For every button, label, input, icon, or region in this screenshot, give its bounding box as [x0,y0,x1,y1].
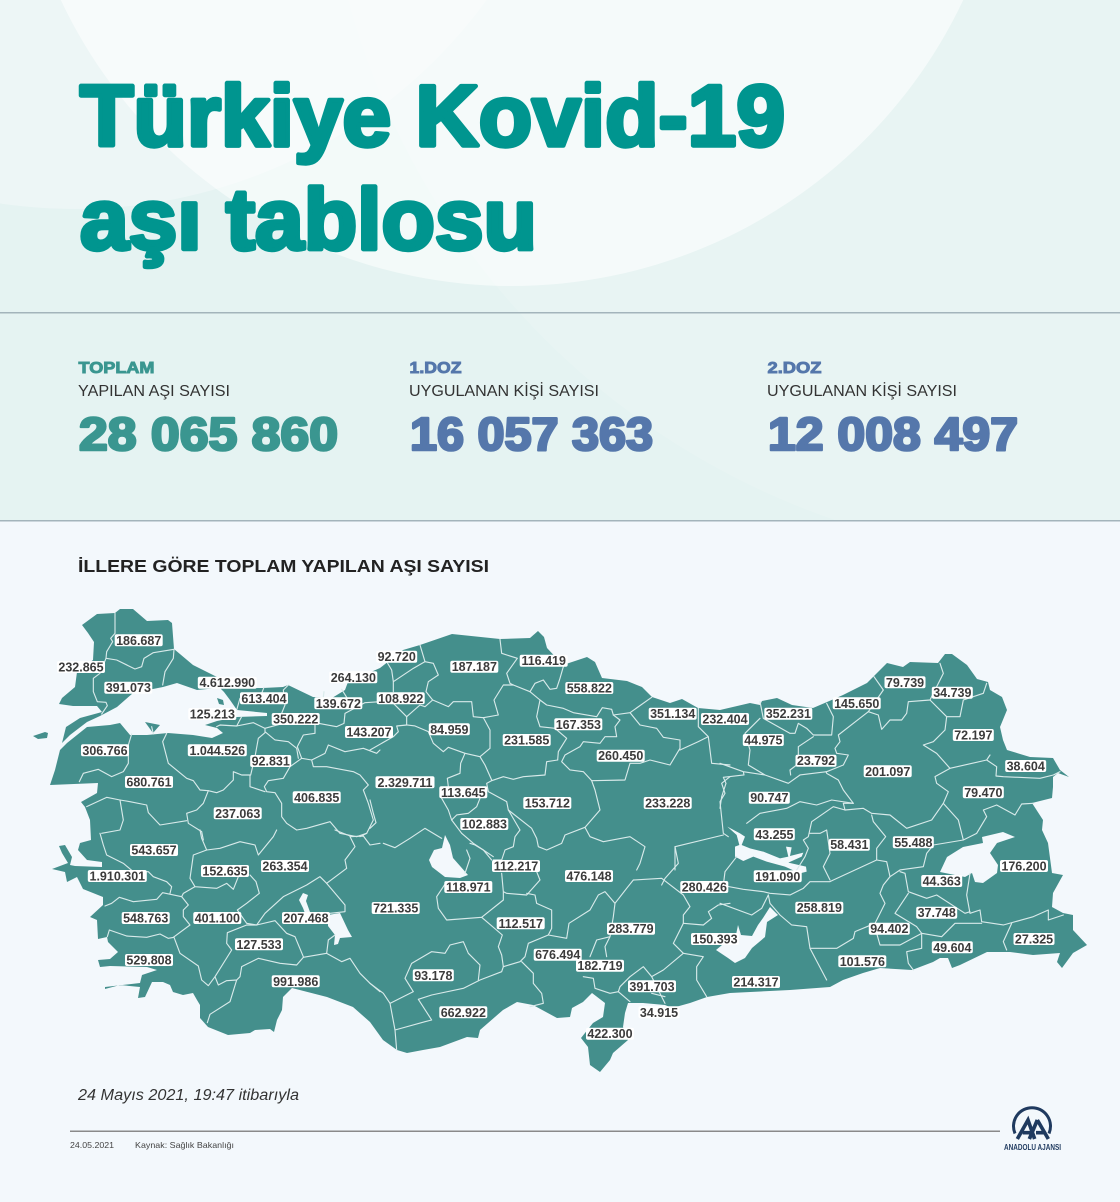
footer source: Kaynak: Sağlık Bakanlığı [135,1140,234,1150]
footer date: 24.05.2021 [70,1140,114,1150]
value: 118.971: 118.971 [446,880,491,894]
timestamp note: 24 Mayıs 2021, 19:47 itibarıyla [77,1087,299,1104]
value: 351.134: 351.134 [650,707,695,721]
title: Türkiye Kovid-19 [80,68,785,164]
value: 680.761: 680.761 [126,776,172,790]
title [80,68,785,268]
value: 55.488: 55.488 [894,836,932,850]
value: 207.468: 207.468 [283,912,329,926]
value: 1.044.526: 1.044.526 [189,744,245,758]
stat: 2. doz: 2.DOZ [768,360,822,377]
value: 232.865: 232.865 [58,660,104,674]
value: 306.766: 306.766 [82,744,128,758]
stat: 2. doz: UYGULANAN KİŞİ SAYISI [767,381,957,400]
value: 112.517: 112.517 [498,917,543,931]
value: 613.404: 613.404 [241,692,287,706]
value: 150.393: 150.393 [692,932,738,946]
value: 58.431: 58.431 [830,838,868,852]
value: 23.792: 23.792 [797,754,835,768]
value: 558.822: 558.822 [567,682,612,696]
value: 37.748: 37.748 [918,906,956,920]
value: 391.703: 391.703 [629,980,675,994]
value: 139.672: 139.672 [316,697,361,711]
value: 38.604: 38.604 [1007,760,1045,774]
footer rule [70,1130,1000,1132]
value: 116.419: 116.419 [521,654,566,668]
stat: 1. doz [409,360,653,460]
value: 201.097: 201.097 [865,765,910,779]
value: 102.883: 102.883 [462,818,507,832]
value: 1.910.301: 1.910.301 [89,870,145,884]
stat: 2. doz: 12 008 497 [768,408,1018,460]
value: 112.217: 112.217 [494,860,538,874]
value: 152.635: 152.635 [202,864,248,878]
value: 260.450: 260.450 [598,749,643,763]
value: 167.353: 167.353 [556,718,601,732]
value: 108.922: 108.922 [378,692,423,706]
value: 231.585: 231.585 [504,734,549,748]
stat: 2. doz [767,360,1018,460]
value: 44.975: 44.975 [744,734,782,748]
value: 84.959: 84.959 [430,723,468,737]
header background [0,0,1120,561]
logo: Anadolu Ajansı: ANADOLU AJANSI [1004,1142,1061,1152]
value: 214.317: 214.317 [733,976,779,990]
value: 79.739: 79.739 [886,676,924,690]
value: 422.300: 422.300 [587,1027,633,1041]
province value labels [57,634,1054,1041]
value: 543.657: 543.657 [131,844,177,858]
value: 391.073: 391.073 [106,681,151,695]
value: 127.533: 127.533 [236,938,282,952]
value: 93.178: 93.178 [414,969,452,983]
value: 94.402: 94.402 [870,922,908,936]
value: 991.986: 991.986 [273,975,318,989]
stat: 1. doz: UYGULANAN KİŞİ SAYISI [409,381,599,400]
value: 233.228: 233.228 [645,796,690,810]
value: 187.187: 187.187 [452,660,497,674]
map section background [0,522,1120,1202]
value: 43.255: 43.255 [755,828,793,842]
value: 721.335: 721.335 [373,902,418,916]
map of Turkey [33,609,1087,1072]
value: 49.604: 49.604 [933,941,971,955]
stat: toplam [78,360,338,460]
value: 2.329.711: 2.329.711 [378,776,433,790]
value: 237.063: 237.063 [215,807,260,821]
value: 113.645: 113.645 [441,786,486,800]
stat: toplam: 28 065 860 [79,408,338,460]
stat: toplam: YAPILAN AŞI SAYISI [78,383,230,400]
value: 264.130: 264.130 [331,671,376,685]
value: 401.100: 401.100 [195,912,240,926]
value: 34.915: 34.915 [640,1006,678,1020]
value: 90.747: 90.747 [750,791,788,805]
value: 352.231: 352.231 [766,707,811,721]
value: 79.470: 79.470 [964,786,1002,800]
value: 176.200: 176.200 [1001,860,1047,874]
value: 280.426: 280.426 [682,880,727,894]
value: 182.719: 182.719 [577,959,623,973]
value: 101.576: 101.576 [840,955,885,969]
value: 676.494: 676.494 [535,948,580,962]
value: 92.720: 92.720 [378,650,416,664]
value: 263.354: 263.354 [262,860,308,874]
value: 662.922: 662.922 [441,1006,486,1020]
map heading: İLLERE GÖRE TOPLAM YAPILAN AŞI SAYISI [78,556,489,576]
value: 92.831: 92.831 [252,754,290,768]
logo: Anadolu Ajansı [1004,1108,1061,1152]
lakes [299,827,1015,963]
value: 125.213: 125.213 [190,708,235,722]
value: 34.739: 34.739 [933,686,971,700]
value: 476.148: 476.148 [566,870,612,884]
stat: 1. doz: 1.DOZ [410,360,462,377]
value: 232.404: 232.404 [702,712,748,726]
value: 258.819: 258.819 [797,901,842,915]
value: 44.363: 44.363 [923,874,961,888]
stat: toplam: TOPLAM [78,360,154,377]
value: 350.222: 350.222 [273,712,318,726]
value: 548.763: 548.763 [123,912,168,926]
stat: 1. doz: 16 057 363 [410,408,653,460]
value: 145.650: 145.650 [834,697,879,711]
landmass [33,609,1087,1072]
value: 72.197: 72.197 [954,728,992,742]
value: 191.090: 191.090 [755,870,800,884]
title: aşı tablosu [80,172,537,268]
province borders [79,613,380,840]
value: 283.779: 283.779 [608,922,654,936]
value: 153.712: 153.712 [525,796,570,810]
value: 529.808: 529.808 [126,954,172,968]
value: 406.835: 406.835 [294,791,339,805]
value: 4.612.990: 4.612.990 [199,676,255,690]
value: 186.687: 186.687 [116,634,161,648]
value: 143.207: 143.207 [346,726,392,740]
value: 27.325: 27.325 [1015,932,1053,946]
